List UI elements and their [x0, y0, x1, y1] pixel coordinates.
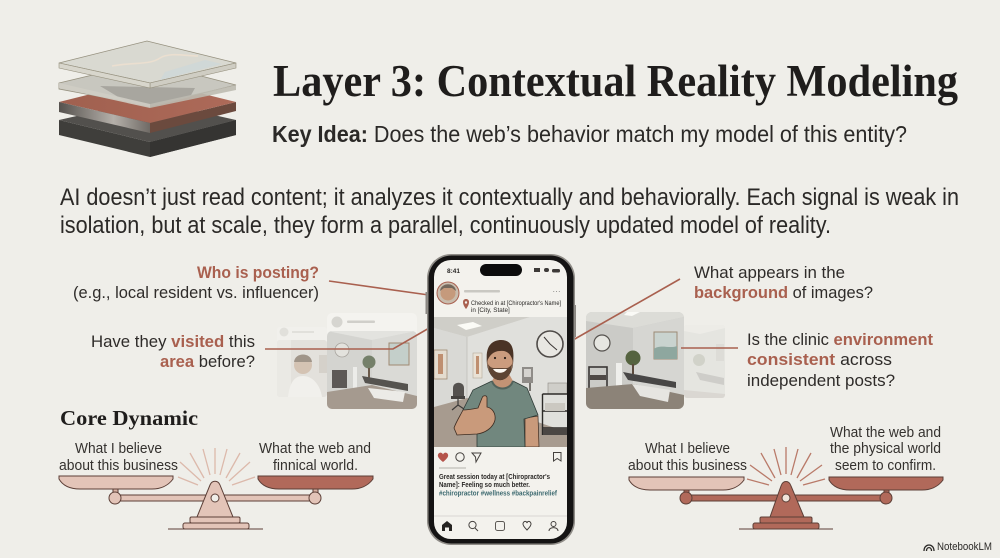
callout: who is posting: [73, 263, 319, 302]
fulcrum: [197, 481, 233, 517]
left scale: balance: [59, 448, 373, 529]
left scale labels: What the web and: [259, 441, 371, 457]
right scale labels: [628, 425, 941, 474]
notebooklm badge: NotebookLM: [937, 541, 992, 553]
callout: clinic environment: Is the clinic environment: [747, 330, 933, 349]
icon: layered stack of plates: [59, 41, 236, 157]
fulcrum: [770, 482, 804, 517]
post caption: #chiropractor #wellness #backpainrelief: [439, 488, 557, 498]
left scale labels: [59, 441, 371, 474]
post photo: smiling man with thumbs up in clinic: [434, 317, 567, 447]
right photo: treatment room post: [586, 312, 684, 409]
left scale labels: What I believe: [75, 441, 162, 457]
intro text: isolation, but at scale, they form a parallel, continuously updated model of reality.: [60, 212, 831, 239]
right scale labels: What I believe: [645, 441, 730, 457]
callout: visited this area: Have they visited this: [91, 332, 255, 351]
callout: visited this area: area before?: [160, 352, 255, 371]
right scale labels: about this business: [628, 458, 747, 474]
post header: avatar and check-in: in [City, State]: [471, 307, 510, 314]
callout: background of images: What appears in the: [694, 263, 845, 282]
callout: background of images: background of images?: [694, 283, 873, 302]
callout: clinic environment: [747, 330, 933, 390]
callout: who is posting: (e.g., local resident vs. influencer): [73, 283, 319, 302]
left faded photo: earlier post: [277, 327, 327, 397]
phone mockup: [426, 254, 576, 545]
callout: who is posting: Who is posting?: [197, 263, 319, 282]
post caption: Name]: Feeling so much better.: [439, 480, 530, 489]
right scale: balance: [629, 447, 943, 529]
left scale labels: about this business: [59, 458, 178, 474]
pans: [59, 476, 173, 489]
heading: core dynamic: Core Dynamic: [60, 406, 198, 430]
right faded photo: independent post: [684, 325, 725, 398]
right scale labels: seem to confirm.: [835, 458, 936, 474]
callout: visited this area: [91, 332, 255, 371]
bottom navigation bar: [434, 516, 567, 531]
right scale labels: the physical world: [830, 441, 941, 457]
leader lines: [265, 279, 738, 349]
pans: [629, 477, 744, 490]
status bar: 8:41: [447, 268, 460, 275]
rays: [747, 447, 825, 485]
callout: clinic environment: consistent across: [747, 350, 892, 369]
post actions: [438, 452, 561, 469]
left scale labels: finnical world.: [273, 458, 358, 474]
key idea: Key Idea: Does the web’s behavior match my model of this entity?: [272, 121, 907, 147]
beam: [687, 495, 887, 501]
post caption: Great session today at [Chiropractor's: [439, 472, 550, 481]
post header: avatar and check-in: ...: [553, 288, 561, 294]
beam: [116, 495, 316, 501]
right scale labels: What the web and: [830, 425, 941, 441]
post header: avatar and check-in: Checked in at [Chiropractor's Name]: [471, 300, 561, 307]
post header: avatar and check-in: [437, 282, 561, 314]
title: Layer 3: Contextual Reality Modeling: [273, 56, 958, 106]
phone body: [426, 254, 576, 545]
callout: background of images: [694, 263, 873, 302]
rays: [178, 448, 255, 485]
status bar: [447, 264, 560, 276]
post caption: [439, 472, 557, 498]
callout: clinic environment: independent posts?: [747, 371, 895, 390]
intro text: [60, 184, 959, 239]
left photo: treatment room post: [327, 313, 417, 409]
